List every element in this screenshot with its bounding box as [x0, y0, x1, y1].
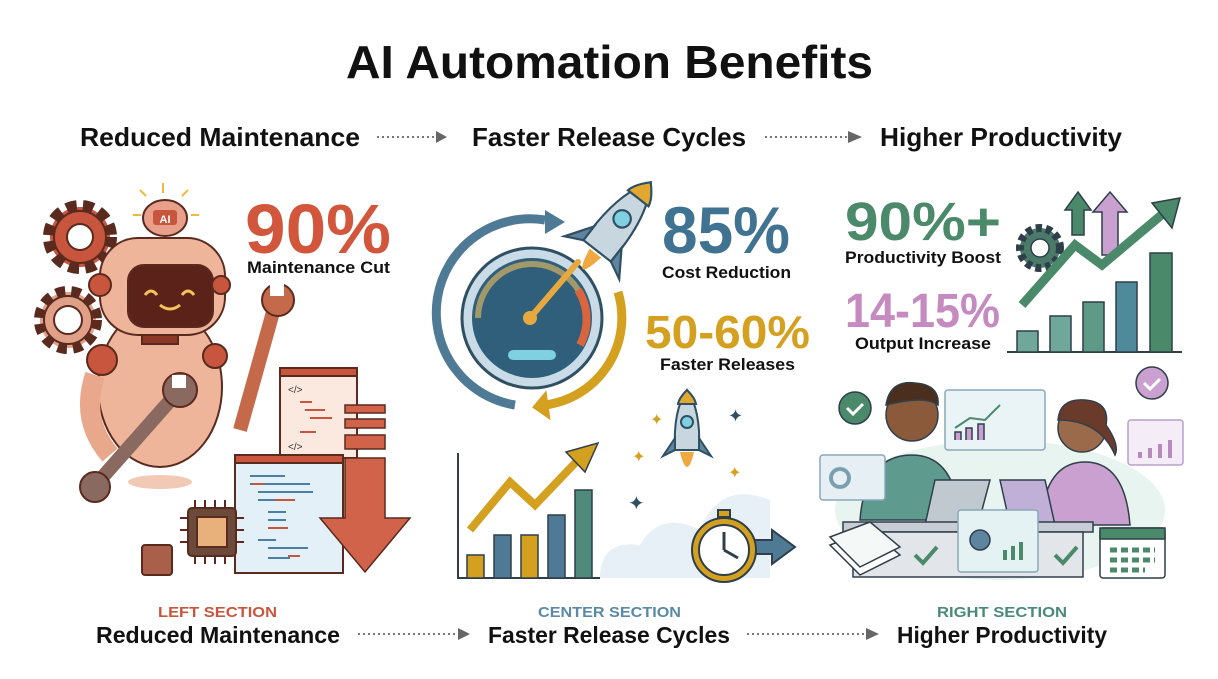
icon: chips [142, 500, 244, 575]
wrenches [240, 305, 275, 430]
icon: rocket launch: ✦ [728, 406, 743, 426]
panel: right (higher productivity) [820, 192, 1183, 580]
icon: robot: AI [160, 214, 170, 226]
icon: robot [80, 200, 294, 502]
panel: right (higher productivity): Productivity Boost [845, 248, 1001, 267]
screens [945, 390, 1045, 450]
panel: right (higher productivity): Output Increase [855, 334, 991, 353]
arrow: top 1 [377, 131, 447, 143]
icon: rocket top [555, 161, 678, 291]
stat: 90%: 90% [245, 190, 391, 268]
illustration: team at desk [820, 367, 1183, 580]
label: center section: Faster Release Cycles [488, 622, 730, 648]
icon: rocket launch: ✦ [628, 493, 645, 515]
panel: center (faster release cycles) [436, 161, 810, 582]
top flow row [80, 122, 1123, 152]
panel: left (reduced maintenance): Maintenance Cut [247, 258, 390, 277]
icon: code windows [235, 368, 357, 573]
panel: center (faster release cycles): Cost Reduction [662, 263, 791, 282]
title: AI Automation Benefits [346, 36, 873, 88]
icon: rocket launch: ✦ [728, 465, 741, 482]
icon: rocket launch: ✦ [650, 412, 663, 429]
icon: rocket launch: ✦ [632, 449, 645, 466]
arrow: top 2 [765, 131, 862, 143]
label: left section: Reduced Maintenance [96, 622, 340, 648]
check bubbles [839, 392, 871, 424]
icon: stopwatch [692, 510, 795, 582]
icon: gauge [462, 248, 602, 388]
chart: growth bars [1007, 192, 1182, 352]
arrow: bottom 1 [358, 628, 470, 640]
panel: center (faster release cycles): Faster Releases [660, 355, 795, 374]
stat: 14-15%: 14-15% [845, 285, 1000, 338]
icon: cycle arrows [436, 210, 622, 416]
stat: 50-60%: 50-60% [645, 306, 810, 358]
top flow row: Faster Release Cycles [472, 122, 746, 152]
arrow: bottom 2 [747, 628, 879, 640]
papers [830, 530, 900, 575]
top flow row: Higher Productivity [880, 122, 1123, 152]
bottom flow row [96, 604, 1107, 648]
label: right section [897, 604, 1107, 648]
icon: down arrow [320, 405, 410, 572]
stat: 85%: 85% [662, 193, 790, 267]
laptops [925, 480, 990, 525]
icon: rocket launch [600, 390, 770, 578]
icon: gears [40, 207, 110, 348]
icon: code windows: </> [288, 385, 303, 396]
panel: left (reduced maintenance) [40, 183, 410, 575]
man [860, 455, 960, 520]
label: center section [488, 604, 730, 648]
label: right section: RIGHT SECTION [937, 604, 1067, 621]
label: center section: CENTER SECTION [538, 604, 681, 621]
woman [1040, 462, 1130, 525]
label: left section [96, 604, 340, 648]
desk [843, 522, 1093, 532]
stat: 90%+: 90%+ [845, 192, 1001, 252]
top flow row: Reduced Maintenance [80, 122, 360, 152]
calendar [1100, 528, 1165, 578]
label: left section: LEFT SECTION [158, 604, 277, 621]
brain [143, 200, 187, 236]
icon: code windows: </> [288, 442, 303, 453]
label: right section: Higher Productivity [897, 622, 1107, 648]
chart: bars with arrow [458, 443, 600, 578]
